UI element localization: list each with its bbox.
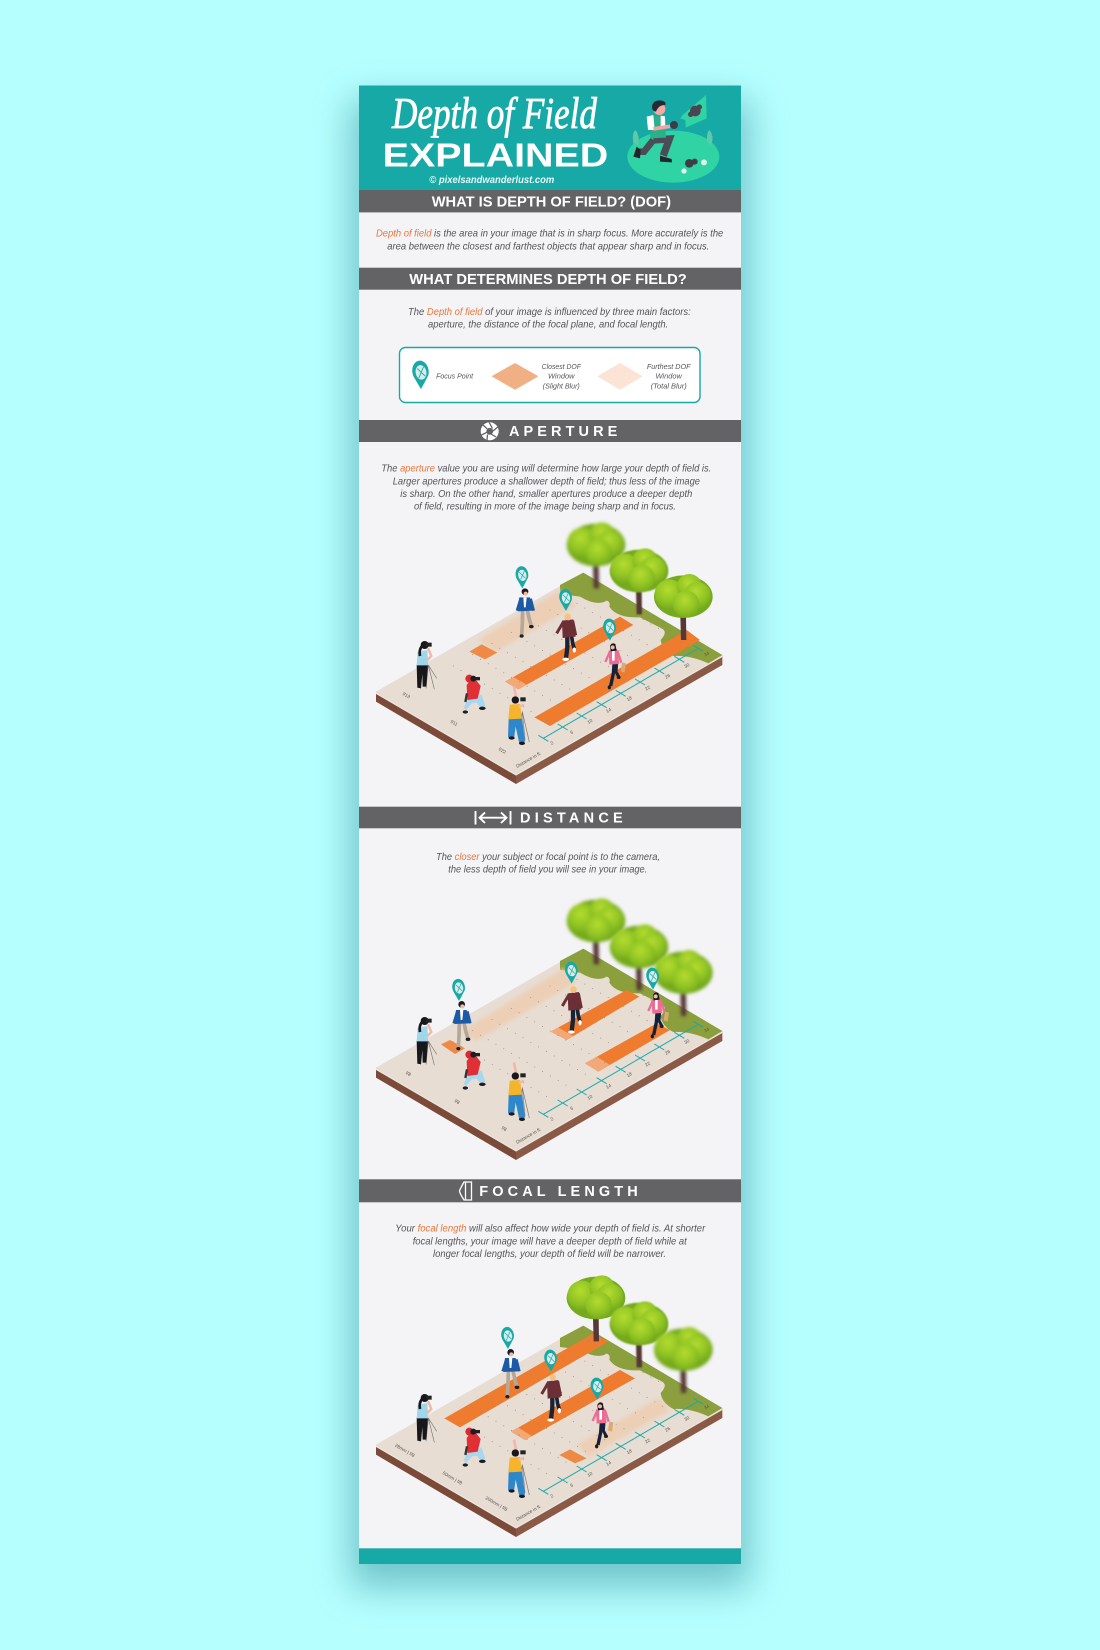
text block: three factors: aperture, the distance of the focal plane, and focal length. bbox=[428, 319, 668, 331]
legend label: closest dof: Window bbox=[548, 372, 575, 381]
heading bar: aperture: APERTURE bbox=[509, 424, 618, 440]
text block: dof definition: Depth of field is the area in your image that is in sharp focus. More accurately is the bbox=[376, 228, 723, 240]
text block: aperture: The aperture value you are using will determine how large your depth of field is. bbox=[381, 463, 711, 475]
heading bar: what is dof: WHAT IS DEPTH OF FIELD? (DOF) bbox=[432, 194, 671, 211]
text block: distance: the less depth of field you will see in your image. bbox=[448, 864, 647, 876]
text block: dof definition bbox=[376, 228, 723, 252]
title: depth of field: Depth of Field bbox=[391, 89, 598, 138]
legend label: furthest dof: (Total Blur) bbox=[651, 381, 687, 390]
copyright: © pixelsandwanderlust.com bbox=[429, 174, 554, 186]
focal length labels: 50mm | f/8 bbox=[442, 1470, 464, 1486]
legend bbox=[400, 348, 700, 402]
swatch: closest dof bbox=[492, 364, 538, 389]
icon: focus point pin bbox=[412, 361, 429, 389]
scene: distance diagram bbox=[376, 898, 722, 1160]
text block: focal length bbox=[395, 1223, 706, 1260]
heading bar: what determines dof: WHAT DETERMINES DEPTH OF FIELD? bbox=[409, 271, 687, 288]
text block: focal length: focal lengths, your image will have a deeper depth of field while at bbox=[413, 1235, 688, 1247]
focal length labels: 200mm | f/8 bbox=[485, 1495, 509, 1512]
dof bands bbox=[469, 590, 700, 726]
legend label: closest dof: (Slight Blur) bbox=[543, 381, 580, 390]
legend label: focus point: Focus Point bbox=[436, 372, 474, 381]
scene: aperture diagram bbox=[376, 522, 722, 784]
heading bar: aperture bbox=[359, 420, 741, 442]
aperture labels: f/13 bbox=[402, 691, 411, 700]
heading bar: what determines dof bbox=[359, 268, 741, 290]
text block: aperture: Larger apertures produce a shallower depth of field; thus less of the image bbox=[393, 475, 700, 487]
subjects bbox=[501, 1327, 613, 1448]
text block: distance: The closer your subject or focal point is to the camera, bbox=[436, 851, 660, 863]
panel shadow bbox=[350, 100, 750, 1588]
focal length labels bbox=[394, 1443, 509, 1512]
dof bands bbox=[444, 1333, 670, 1463]
dof bands bbox=[441, 968, 670, 1072]
aperture labels bbox=[405, 1070, 508, 1132]
subjects bbox=[516, 566, 626, 689]
heading bar: distance: DISTANCE bbox=[520, 810, 623, 826]
icon: lens bbox=[460, 1182, 472, 1200]
trees bbox=[567, 522, 713, 640]
icon: aperture bbox=[481, 422, 499, 440]
trees bbox=[567, 898, 713, 1016]
icon: distance arrows bbox=[476, 811, 510, 824]
aperture labels: f/8 bbox=[454, 1098, 461, 1105]
heading bar: focal length: FOCAL LENGTH bbox=[479, 1184, 638, 1200]
aperture labels: f/8 bbox=[501, 1125, 508, 1132]
heading bar: focal length bbox=[359, 1179, 741, 1202]
text block: focal length: Your focal length will also affect how wide your depth of field is. At shorter bbox=[395, 1223, 706, 1235]
icon: photographer illustration bbox=[627, 95, 719, 183]
heading bar: distance bbox=[359, 807, 741, 828]
trees bbox=[567, 1275, 713, 1393]
text block: focal length: longer focal lengths, your depth of field will be narrower. bbox=[433, 1248, 666, 1260]
legend label: furthest dof: Furthest DOF bbox=[647, 362, 691, 371]
subjects bbox=[452, 962, 669, 1050]
focal length labels: 28mm | f/8 bbox=[394, 1443, 416, 1458]
legend label: closest dof: Closest DOF bbox=[542, 362, 581, 371]
legend label: furthest dof bbox=[647, 362, 691, 390]
text block: aperture: of field, resulting in more of the image being sharp and in focus. bbox=[414, 501, 676, 513]
text block: aperture: is sharp. On the other hand, smaller apertures produce a deeper depth bbox=[400, 488, 692, 500]
title: explained: EXPLAINED bbox=[383, 138, 608, 175]
footer bar bbox=[359, 1548, 741, 1564]
aperture labels: f/22 bbox=[498, 747, 507, 755]
infographic panel bbox=[359, 86, 741, 1564]
header banner bbox=[359, 86, 741, 190]
text block: dof definition: area between the closest and farthest objects that appear sharp and in focus. bbox=[387, 240, 709, 252]
heading bar: what is dof bbox=[359, 190, 741, 212]
text block: three factors bbox=[408, 306, 691, 331]
legend label: closest dof bbox=[542, 362, 581, 390]
legend label: furthest dof: Window bbox=[655, 372, 683, 381]
aperture labels bbox=[402, 691, 507, 755]
text block: distance bbox=[436, 851, 660, 876]
text block: aperture bbox=[381, 463, 711, 513]
scene: focal length diagram bbox=[376, 1275, 722, 1537]
aperture labels: f/8 bbox=[405, 1070, 412, 1077]
text block: three factors: The Depth of field of your image is influenced by three main factors: bbox=[408, 306, 691, 318]
aperture labels: f/11 bbox=[450, 719, 459, 727]
swatch: furthest dof bbox=[598, 364, 642, 389]
